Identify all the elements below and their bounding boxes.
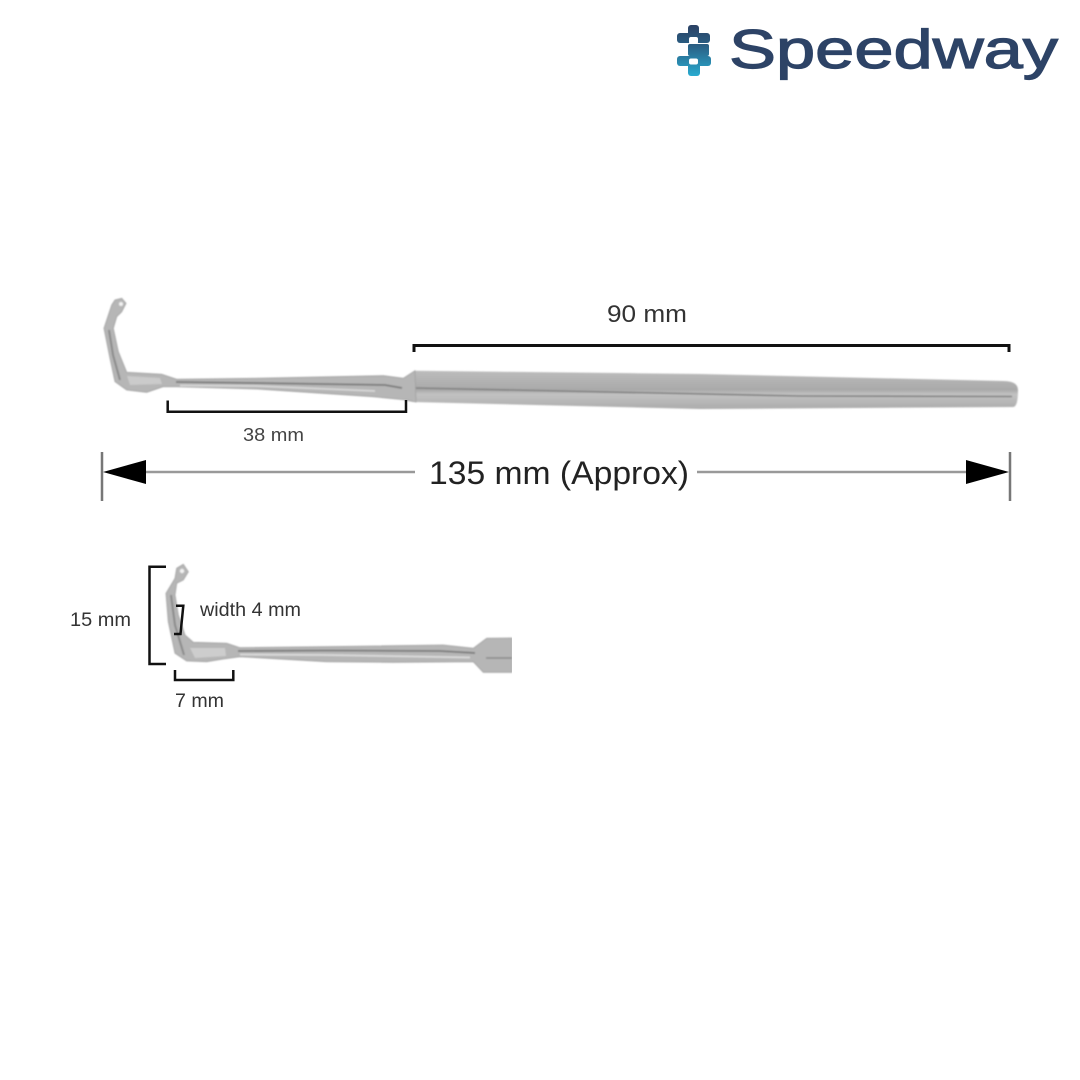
infographic canvas xyxy=(72,25,1059,707)
label: 38 mm: 38 mm xyxy=(243,425,304,445)
bracket: 38 mm shaft xyxy=(168,400,406,412)
logo wordmark: Speedway xyxy=(729,18,1059,80)
label: 7 mm: 7 mm xyxy=(175,691,224,712)
icon: logo cross mark xyxy=(677,25,711,76)
arrow: overall length 135 mm xyxy=(102,452,1010,501)
bracket: width 4 mm xyxy=(174,606,183,634)
label: width 4 mm: width 4 mm xyxy=(199,600,301,621)
label: 15 mm: 15 mm xyxy=(70,610,131,631)
bracket: 7 mm xyxy=(175,670,233,680)
bracket: 15 mm height xyxy=(150,567,166,664)
label: 135 mm (Approx): 135 mm (Approx) xyxy=(429,455,689,491)
instrument: full retractor photo xyxy=(104,298,1018,409)
label: 90 mm: 90 mm xyxy=(607,301,687,328)
instrument: hook close-up photo xyxy=(166,564,512,672)
logo: Speedway xyxy=(677,18,1059,80)
bracket: 90 mm handle xyxy=(414,346,1009,352)
